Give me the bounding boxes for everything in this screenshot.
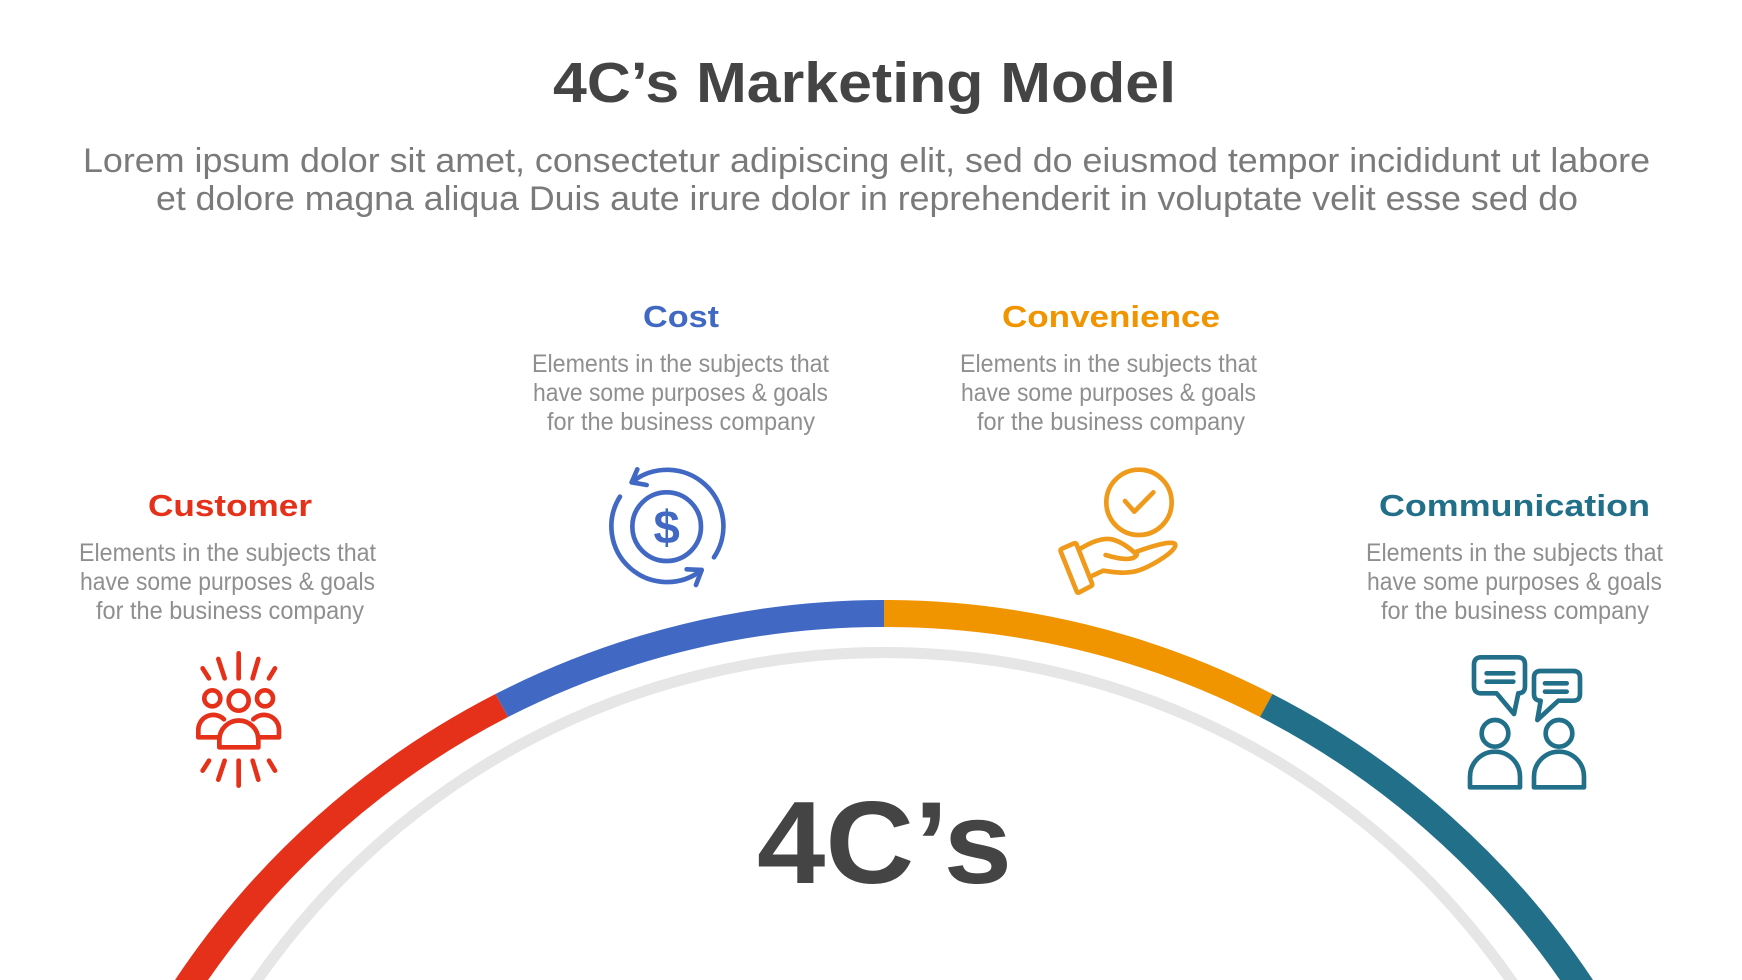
description: customer [79,539,376,625]
description: cost: for the business company [547,408,815,436]
description: convenience: Elements in the subjects that [960,350,1257,378]
description: communication: for the business company [1381,597,1649,625]
title: 4C’s Marketing Model [553,51,1176,115]
arc segment: cost [496,600,884,717]
description: communication: have some purposes & goals [1367,568,1662,596]
inner grey ring [250,647,1518,980]
heading: customer: Customer [148,488,312,523]
semicircle diagram [175,600,1593,980]
icon: people group with rays [198,653,279,786]
subtitle text block: Lorem ipsum dolor sit amet, consectetur adipiscing elit, sed do eiusmod tempor incididunt ut labore [83,142,1650,180]
heading: convenience: Convenience [1002,299,1220,334]
description: communication [1366,539,1663,625]
description: customer: have some purposes & goals [80,568,375,596]
description: convenience: for the business company [977,408,1245,436]
description: convenience [960,350,1257,436]
description: cost [532,350,829,436]
center label: 4C’s [757,777,1012,908]
arc segment: customer [175,694,508,980]
description: cost: Elements in the subjects that [532,350,829,378]
panel: convenience [960,299,1257,593]
icon: two people talking [1470,657,1584,787]
description: customer: Elements in the subjects that [79,539,376,567]
icon: dollar with circular arrows [611,469,723,585]
description: convenience: have some purposes & goals [961,379,1256,407]
panel: communication [1366,488,1663,787]
heading: cost: Cost [643,299,719,334]
subtitle text block [83,142,1650,218]
arc segment: communication [1260,694,1593,980]
panel: cost [532,299,829,585]
panel: customer [79,488,376,786]
dollar sign: $ [653,502,680,555]
icon: hand holding check [1060,470,1175,593]
description: customer: for the business company [96,597,364,625]
heading: communication: Communication [1379,488,1650,523]
subtitle text block: et dolore magna aliqua Duis aute irure dolor in reprehenderit in voluptate velit esse sed do [156,180,1578,218]
arc segment: convenience [884,600,1272,717]
description: communication: Elements in the subjects that [1366,539,1663,567]
description: cost: have some purposes & goals [533,379,828,407]
